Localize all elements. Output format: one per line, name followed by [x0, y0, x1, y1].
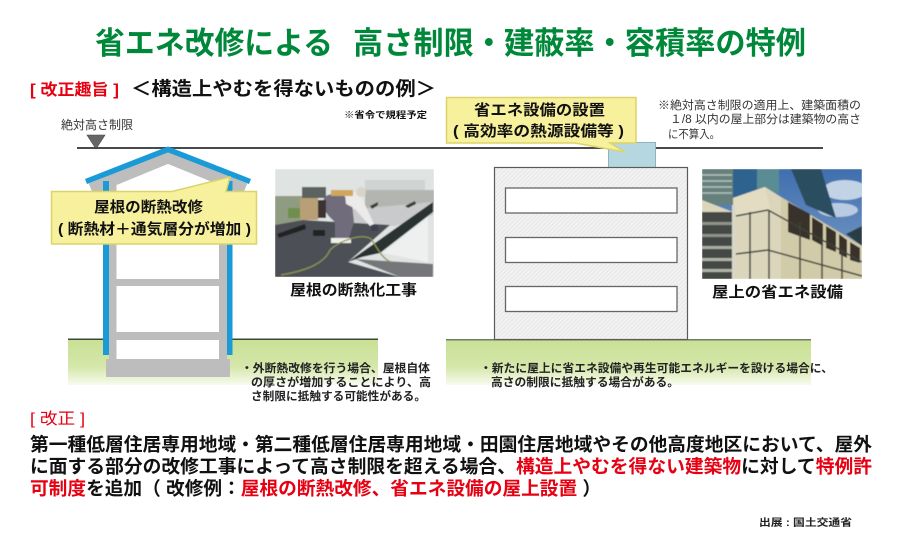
caption: roof insulation work: 屋根の断熱化工事 — [290, 281, 417, 299]
heading: amendment purpose — [30, 78, 436, 100]
callout: energy-saving equipment: ( 高効率の熱源設備等 ) — [453, 122, 624, 140]
text block: rooftop equipment — [480, 361, 833, 389]
text block: rooftop equipment: ・新たに屋上に省エネ設備や再生可能エネルギーを設ける場合に、 — [480, 361, 833, 375]
text block: amendment details: 可制度を追加（ 改修例：屋根の断熱改修、省エネ設備の屋上設置 ） — [30, 478, 601, 499]
callout: roof insulation — [52, 177, 256, 244]
callout: roof insulation: 屋根の断熱改修 — [94, 198, 203, 216]
note: ministerial ordinance: ※省令で規程予定 — [344, 109, 427, 120]
height limit line — [77, 147, 823, 149]
text block: rooftop equipment: 高さの制限に抵触する場合がある。 — [491, 375, 679, 389]
note: height calculation: に不算入。 — [668, 127, 720, 141]
ground: left — [68, 338, 378, 385]
title — [95, 26, 806, 61]
text block: roof thickness: ・外断熱改修を行う場合、屋根自体 — [241, 361, 431, 375]
photo: rooftop equipment — [702, 169, 867, 279]
text block: amendment details: に面する部分の改修工事によって高さ制限を超える場合、構造上やむを得ない建築物に対して特例許 — [30, 456, 872, 477]
note: height calculation: ※絶対高さ制限の適用上、建築面積の — [658, 98, 861, 112]
heading: amendment: [ 改正 ] — [30, 410, 85, 428]
source: 出展 : 国土交通省 — [759, 516, 852, 529]
photo: roof insulation work — [275, 169, 434, 277]
building diagram — [494, 142, 688, 340]
house diagram — [86, 150, 250, 377]
note: height calculation: １/8 以内の屋上部分は建築物の高さ — [670, 112, 861, 126]
text block: amendment details: 第一種低層住居専用地域・第二種低層住居専用地域・田園住居地域やその他高度地区において、屋外 — [30, 434, 872, 455]
callout: energy-saving equipment — [446, 98, 636, 152]
title: 省エネ改修による — [95, 26, 333, 61]
label: absolute height limit: 絶対高さ制限 — [61, 118, 133, 132]
note: height calculation — [658, 98, 861, 141]
heading: amendment purpose: [ 改正趣旨 ] — [30, 81, 119, 99]
text block: amendment details — [30, 434, 872, 499]
caption: rooftop equipment: 屋上の省エネ設備 — [712, 283, 843, 301]
text block: roof thickness: さ制限に抵触する可能性がある。 — [251, 389, 426, 403]
text block: roof thickness — [241, 361, 431, 403]
callout: roof insulation: ( 断熱材＋通気層分が増加 ) — [58, 220, 251, 238]
text block: roof thickness: の厚さが増加することにより、高 — [251, 375, 431, 389]
ground: right — [446, 339, 811, 385]
heading: amendment purpose: ＜構造上やむを得ないものの例＞ — [131, 78, 436, 100]
label: absolute height limit — [61, 118, 133, 149]
callout: energy-saving equipment: 省エネ設備の設置 — [474, 101, 605, 119]
title: 高さ制限・建蔽率・容積率の特例 — [353, 26, 806, 61]
